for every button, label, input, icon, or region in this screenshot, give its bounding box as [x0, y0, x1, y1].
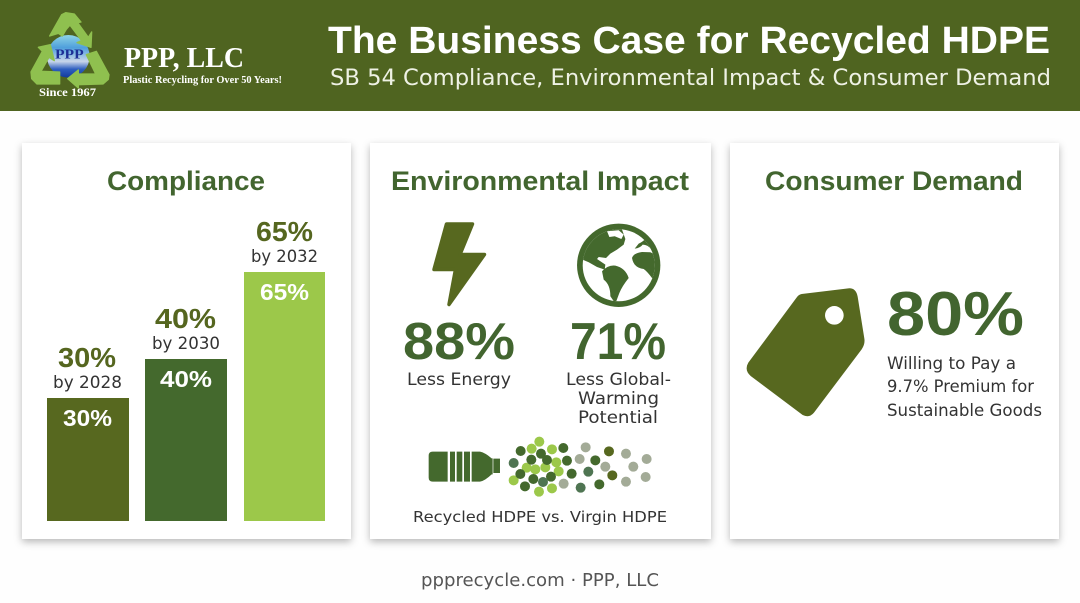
bar 2028: 30%	[58, 342, 116, 373]
stat: 88% less energy: 88%	[403, 313, 515, 371]
stat: 71% less global-warming potential: 71%	[570, 313, 666, 371]
header banner	[0, 0, 1080, 111]
bar 2030: 40%	[155, 303, 216, 334]
bar 2028	[47, 342, 129, 521]
bar 2032	[244, 216, 325, 521]
stat description: Sustainable Goods	[887, 401, 1042, 420]
stat: 71% less global-warming potential: Less Global-	[566, 370, 671, 390]
bar 2030: 40%	[160, 366, 212, 392]
bar 2032: by 2032	[251, 247, 318, 267]
bar 2032: 65%	[256, 216, 313, 247]
icon: recycling globe: PPP	[55, 47, 84, 62]
bar 2032: 65%	[260, 279, 309, 305]
icon: price tag	[747, 288, 865, 416]
bottle	[429, 452, 500, 482]
bar 2030: by 2030	[152, 334, 220, 354]
bar chart	[47, 216, 325, 521]
icon: bottle and pellets	[429, 437, 652, 497]
bar 2028: 30%	[63, 405, 112, 431]
panel: consumer demand	[730, 143, 1059, 539]
stat: 71% less global-warming potential: Potential	[578, 408, 658, 428]
bar 2028: by 2028	[53, 373, 122, 393]
stat description: Willing to Pay a	[887, 354, 1016, 373]
bar 2030	[145, 303, 227, 521]
pellets	[509, 437, 564, 497]
since 1967: Since 1967	[39, 85, 96, 99]
stat: 88% less energy	[403, 313, 515, 390]
stat: 71% less global-warming potential	[566, 313, 671, 428]
subtitle: SB 54 Compliance, Environmental Impact & Consumer Demand	[330, 66, 1051, 91]
logo	[31, 13, 282, 99]
stat: 88% less energy: Less Energy	[407, 370, 511, 390]
panel: compliance	[22, 143, 351, 539]
panel: environmental impact	[370, 143, 711, 539]
icon: globe	[577, 224, 660, 307]
caption: Recycled HDPE vs. Virgin HDPE	[413, 508, 667, 526]
stat: 80%: 80%	[887, 280, 1024, 349]
tagline: Plastic Recycling for Over 50 Years!	[123, 75, 282, 86]
heading: compliance: Compliance	[107, 166, 265, 196]
heading: consumer demand: Consumer Demand	[765, 166, 1023, 196]
icon: recycling globe	[31, 13, 109, 88]
title: The Business Case for Recycled HDPE	[328, 20, 1050, 62]
stat: 71% less global-warming potential: Warming	[578, 389, 659, 409]
heading: environmental impact: Environmental Impact	[391, 166, 689, 196]
stat description: 9.7% Premium for	[887, 377, 1034, 396]
company name: PPP, LLC	[124, 42, 244, 74]
stat description	[887, 354, 1042, 420]
footer: ppprecycle.com · PPP, LLC	[421, 570, 659, 591]
icon: lightning bolt	[434, 224, 484, 304]
